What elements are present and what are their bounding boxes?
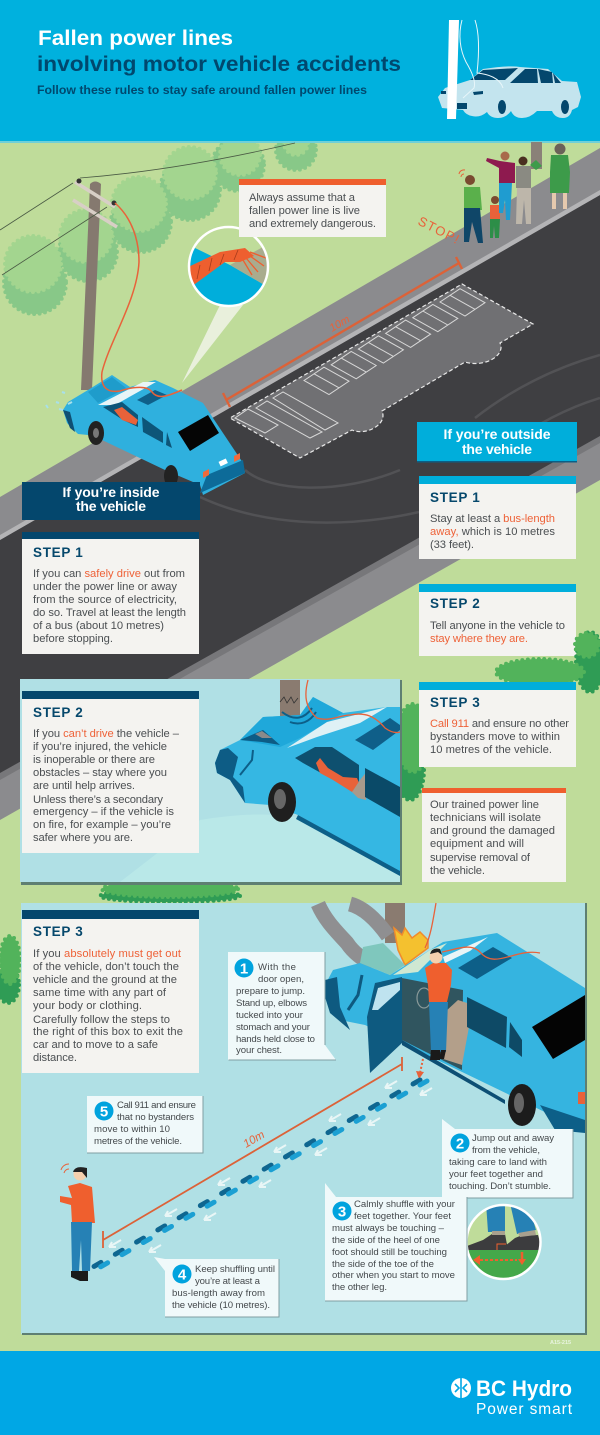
step 2 text box: on fire, for example – you’re: [33, 819, 171, 831]
technicians note: equipment and will: [430, 838, 524, 850]
callout 3: foot should still be touching: [332, 1247, 447, 1258]
vehicle with open door: [325, 933, 585, 1133]
header band: [0, 0, 600, 143]
callout: assume live: fallen power line is live: [249, 205, 360, 217]
smoke and pole: [318, 903, 405, 965]
callout 5: that no bystanders: [117, 1112, 194, 1123]
person: child: [490, 196, 500, 238]
trees behind pole: [4, 130, 316, 314]
heading: outside the vehicle: [417, 422, 577, 462]
footer band: [0, 1351, 600, 1435]
step 3 text box: [22, 910, 199, 1073]
callout 4: Keep shuffling until: [195, 1264, 275, 1275]
open door: [367, 977, 402, 1073]
technicians note: Our trained power line: [430, 799, 539, 811]
callout 1: 1: [240, 960, 248, 978]
dotted jump arrow: [416, 1059, 424, 1079]
inside step 1: do so. Travel at least the length: [33, 607, 186, 619]
magnifier: frayed wire: [188, 226, 270, 308]
panel: step 3 illustration: [21, 903, 587, 1335]
technicians note: supervise removal of: [430, 852, 531, 864]
callout 2: Jump out and away: [472, 1133, 554, 1144]
step 3 text box: If you absolutely must get out: [33, 948, 182, 960]
callout 2: touching. Don’t stumble.: [449, 1181, 551, 1192]
pole in panel: [280, 680, 300, 716]
10m arrow: [103, 1057, 402, 1248]
step 2 text box: is inoperable or there are: [33, 754, 155, 766]
10 metre arrow on sidewalk: 10m: [328, 314, 352, 335]
person: woman on phone: [459, 170, 483, 243]
heading: inside the vehicle: the vehicle: [76, 498, 146, 514]
step 3 text box: of the vehicle, don’t touch the: [33, 961, 179, 973]
step 3 text box: distance.: [33, 1052, 77, 1064]
outside step 1: away, which is 10 metres: [430, 526, 555, 538]
step 2 text box: [22, 691, 199, 853]
outside step 1: Stay at least a bus-length: [430, 513, 555, 525]
icon: car against pole: [438, 20, 581, 119]
outside step 3: bystanders move to within: [430, 731, 560, 743]
zoom pointer cone: [182, 305, 243, 383]
callout 2: your feet together and: [449, 1169, 543, 1180]
callout 1: tucked into your: [236, 1010, 304, 1021]
technicians note: technicians will isolate: [430, 812, 541, 824]
callout: assume live: Always assume that a: [249, 192, 356, 204]
outside step 3: STEP 3: [430, 695, 480, 710]
callout 3: other when you start to move: [332, 1270, 455, 1281]
direction arrows: [109, 1081, 432, 1252]
callout 1: [228, 952, 336, 1060]
step 2 text box: Unless there’s a secondary: [33, 794, 163, 806]
crashed car close-up: [215, 697, 400, 876]
downed orange wire: [102, 203, 182, 396]
outside step 2: Tell anyone in the vehicle to: [430, 620, 565, 632]
callout: assume live: [239, 179, 386, 237]
car hit pole: [46, 375, 245, 495]
step 2 text box: safer where you are.: [33, 832, 133, 844]
heading: outside the vehicle: the vehicle: [462, 441, 532, 457]
callout 3: the side of the toe of the: [332, 1259, 434, 1270]
step 2 text box: if you’re injured, the vehicle: [33, 741, 167, 753]
document code: A15-215: [550, 1340, 571, 1346]
outside step 2: stay where they are.: [430, 633, 528, 645]
callout 5: move to within 10: [94, 1124, 170, 1135]
step 3 text box: car and to move to a safe: [33, 1039, 158, 1051]
callout 3: Calmly shuffle with your: [354, 1199, 456, 1210]
callout 2: 2: [456, 1136, 464, 1152]
inside step 1: [22, 532, 199, 654]
step 3 text box: the right of this box to exit the: [33, 1026, 183, 1038]
person: woman in green: [550, 144, 570, 209]
10 metre arrow on sidewalk: [223, 257, 462, 407]
callout 2: [442, 1119, 573, 1198]
step 2 text box: obstacles – stay where you: [33, 767, 167, 779]
callout 4: [154, 1257, 279, 1317]
callout 4: 4: [178, 1266, 187, 1284]
step 3 text box: your body or clothing.: [33, 1000, 142, 1012]
inside step 1: of a bus (about 10 metres): [33, 620, 164, 632]
callout 2: from the vehicle,: [472, 1145, 540, 1156]
callout 3: the other leg.: [332, 1282, 387, 1293]
person on phone at safe distance: [60, 1164, 95, 1281]
feet close-up: [468, 1204, 542, 1280]
outside step 2: STEP 2: [430, 596, 480, 611]
outside step 1: (33 feet).: [430, 539, 474, 551]
callout 1: With the: [258, 962, 296, 973]
inside step 1: STEP 1: [33, 545, 83, 560]
people waiting at safe distance: [459, 142, 570, 243]
callout 2: taking care to land with: [449, 1157, 547, 1168]
callout 4: bus-length away from: [172, 1288, 265, 1299]
title: involving motor vehicle accidents: [37, 52, 401, 76]
person jumping out of door: [417, 949, 452, 1060]
inside step 1: If you can safely drive out from: [33, 568, 185, 580]
BC Hydro logo: [451, 1376, 573, 1418]
heading: inside the vehicle: If you’re inside: [62, 484, 160, 500]
callout 1: hands held close to: [236, 1034, 315, 1045]
outside step 3: [419, 682, 576, 767]
callout 3: 3: [338, 1204, 346, 1220]
callout 1: Stand up, elbows: [236, 998, 307, 1009]
inside step 1: under the power line or away: [33, 581, 177, 593]
callout 1: stomach and your: [236, 1022, 311, 1033]
shuffling footprints: [93, 1080, 427, 1270]
step 3 text box: same time with any part of: [33, 987, 167, 999]
bus seat markings: [235, 289, 485, 438]
BC Hydro logo: BC Hydro: [476, 1376, 572, 1401]
road with sidewalks: [0, 148, 600, 820]
callout 3: must always be touching –: [332, 1223, 445, 1234]
callout 5: [87, 1096, 203, 1153]
title: [37, 26, 401, 97]
bus-length outline on road: [230, 284, 533, 458]
step 2 text box: emergency – if the vehicle is: [33, 806, 174, 818]
title: Fallen power lines: [38, 26, 233, 50]
callout 1: door open,: [258, 974, 304, 985]
outside step 1: [419, 476, 576, 559]
outside step 3: Call 911 and ensure no other: [430, 718, 569, 730]
step 3 text box: vehicle and the ground at the: [33, 974, 177, 986]
BC Hydro logo: Power smart: [476, 1401, 573, 1418]
10m arrow: 10m: [242, 1129, 267, 1151]
callout 3: the side of the heel of one: [332, 1235, 440, 1246]
step 2 text box: If you can’t drive the vehicle –: [33, 728, 180, 740]
technicians note: and ground the damaged: [430, 825, 555, 837]
icon: logo globe: [451, 1378, 471, 1398]
callout 3: [325, 1183, 467, 1301]
callout 5: Call 911 and ensure: [117, 1100, 196, 1111]
callout 1: your chest.: [236, 1045, 282, 1056]
outside step 1: STEP 1: [430, 490, 480, 505]
callout 5: metres of the vehicle.: [94, 1136, 182, 1147]
panel: step 2 illustration: [20, 679, 402, 885]
outside step 3: 10 metres of the vehicle.: [430, 744, 552, 756]
callout 4: the vehicle (10 metres).: [172, 1300, 270, 1311]
inside step 1: before stopping.: [33, 633, 113, 645]
inside step 1: from the source of electricity,: [33, 594, 177, 606]
STOP label: STOP!: [416, 213, 462, 247]
step 3 text box: STEP 3: [33, 924, 83, 939]
technicians note: the vehicle.: [430, 865, 485, 877]
utility pole: [0, 143, 295, 390]
heading: inside the vehicle: [22, 482, 200, 520]
callout 5: 5: [100, 1104, 108, 1120]
title: Follow these rules to stay safe around fallen power lines: [37, 85, 367, 97]
bushes right and lower: [0, 632, 600, 1003]
person: man in grey: [516, 156, 531, 224]
step 2 text box: STEP 2: [33, 705, 83, 720]
fire: [394, 928, 428, 965]
step 3 text box: Carefully follow the steps to: [33, 1014, 170, 1026]
callout 4: you’re at least a: [195, 1276, 261, 1287]
person: man pointing: [486, 152, 515, 220]
heading: outside the vehicle: If you’re outside: [444, 426, 551, 442]
technicians note: [422, 788, 566, 882]
callout 1: prepare to jump.: [236, 986, 305, 997]
callout: assume live: and extremely dangerous.: [249, 218, 376, 230]
step 2 text box: are until help arrives.: [33, 780, 135, 792]
callout 3: feet together. Your feet: [354, 1211, 451, 1222]
outside step 2: [419, 584, 576, 656]
